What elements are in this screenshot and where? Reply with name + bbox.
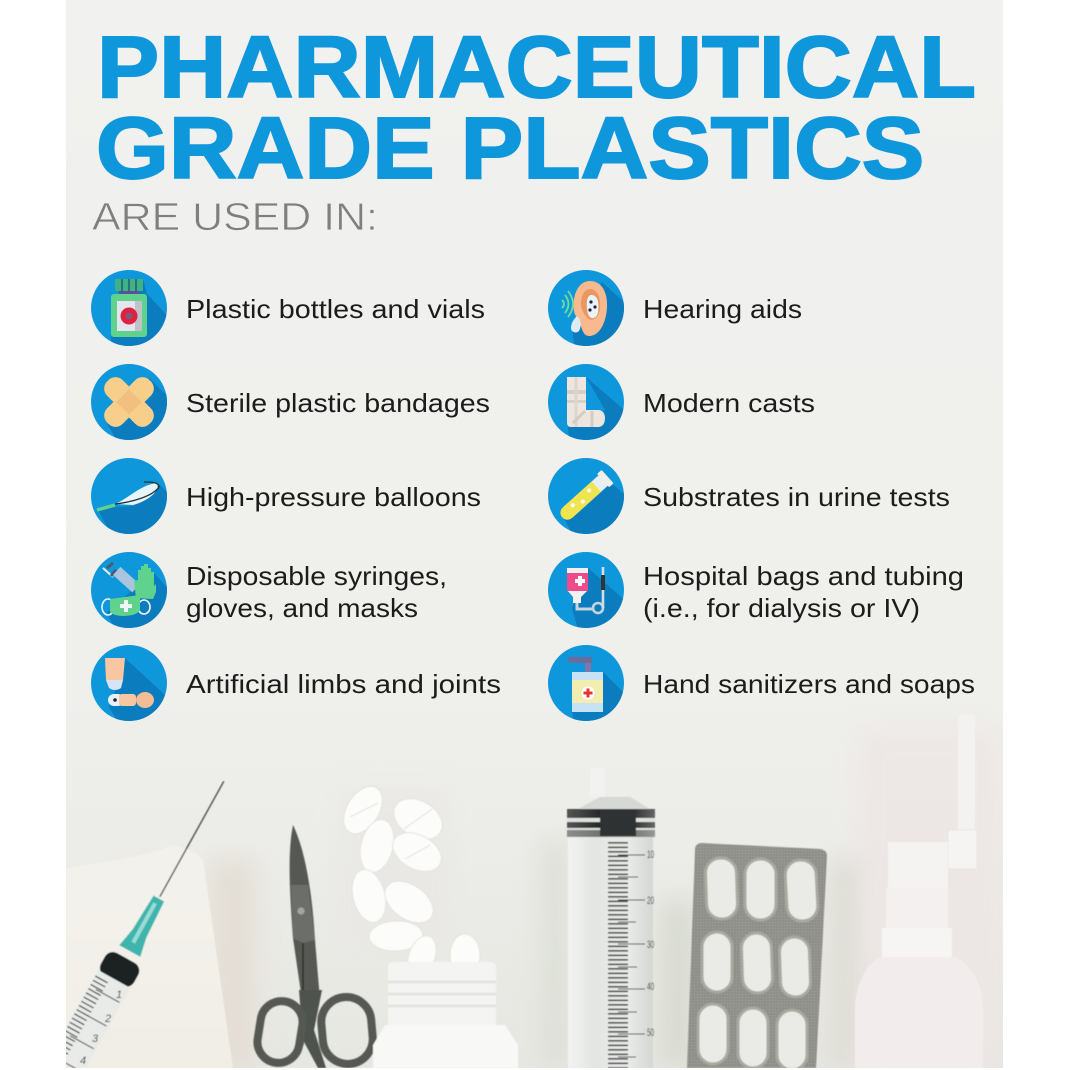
subtitle: ARE USED IN:	[92, 195, 378, 239]
large syringe	[567, 768, 655, 1068]
pill score lines	[350, 803, 432, 859]
list item: hospital bags and tubing: (i.e., for dialysis or IV)	[643, 593, 920, 623]
list item: disposable syringes, gloves, and masks: Disposable syringes,	[186, 561, 447, 591]
list item: artificial limbs and joints: Artificial limbs and joints	[186, 669, 501, 699]
photo objects	[37, 715, 983, 1070]
list item: hospital bags and tubing	[548, 552, 962, 628]
soft shadows	[210, 845, 862, 1066]
list item: substrates in urine tests	[548, 458, 949, 534]
large syringe: 20	[647, 895, 654, 907]
list item: sterile plastic bandages	[91, 364, 489, 440]
spray bottle	[855, 715, 983, 1068]
title: PHARMACEUTICAL	[97, 19, 976, 116]
syringe left scale numbers: 1	[116, 989, 122, 1001]
syringe left scale numbers: 4	[80, 1055, 86, 1067]
syringe left scale numbers: 2	[104, 1013, 111, 1025]
syringe left scale numbers: 3	[92, 1033, 99, 1045]
large syringe: 30	[647, 939, 654, 951]
list item: hand sanitizers and soaps: Hand sanitizers and soaps	[643, 669, 975, 699]
list item: hearing aids: Hearing aids	[643, 294, 802, 324]
list item: sterile plastic bandages: Sterile plastic bandages	[186, 388, 490, 418]
large syringe: 40	[647, 981, 654, 993]
blister pack	[687, 843, 827, 1070]
list item: high-pressure balloons	[91, 458, 480, 534]
list item: modern casts: Modern casts	[643, 388, 815, 418]
pills	[344, 787, 480, 962]
list item: high-pressure balloons: High-pressure balloons	[186, 482, 481, 512]
list item: disposable syringes, gloves, and masks	[91, 552, 444, 628]
large syringe: 50	[647, 1027, 654, 1039]
syringe left scale numbers	[80, 989, 122, 1067]
list item: substrates in urine tests: Substrates in urine tests	[643, 482, 950, 512]
list item: disposable syringes, gloves, and masks: gloves, and masks	[186, 593, 418, 623]
list item: plastic bottles and vials	[91, 270, 484, 346]
title	[96, 19, 976, 197]
list item: hearing aids	[548, 270, 801, 346]
large syringe: 10	[647, 849, 654, 861]
list item: plastic bottles and vials: Plastic bottles and vials	[186, 294, 485, 324]
list item: hand sanitizers and soaps	[548, 645, 974, 721]
list item: modern casts	[548, 364, 814, 440]
syringe left	[66, 780, 225, 1068]
scissors	[254, 825, 375, 1068]
pill bottle	[373, 962, 518, 1068]
towel	[66, 845, 233, 1068]
list item: artificial limbs and joints	[91, 645, 500, 721]
title: GRADE PLASTICS	[96, 100, 924, 197]
photo: medical supplies	[66, 780, 983, 1068]
list item: hospital bags and tubing: Hospital bags and tubing	[643, 561, 964, 591]
